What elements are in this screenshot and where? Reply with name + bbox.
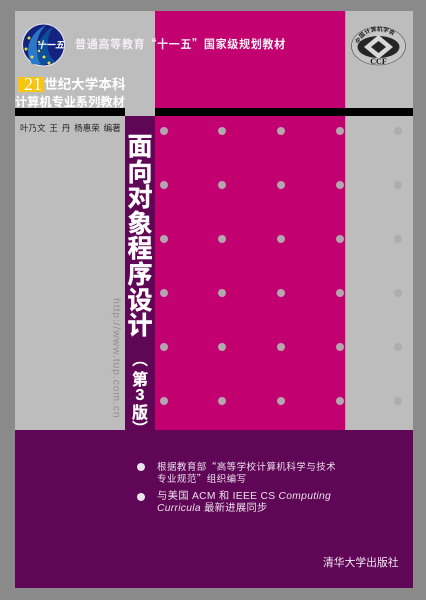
text: bullet 2: 与美国 ACM 和 IEEE CS Computing [157,491,331,502]
text: bullet 1: 专业规范”组织编写 [157,470,247,484]
edition 版: 版 [132,399,148,423]
black bar right [155,108,413,116]
panel: grey book cover [15,11,413,431]
black bar left [15,108,125,116]
text: bullet 1: 根据教育部“高等学校计算机科学与技术 [157,459,336,473]
edition close bracket: ） [128,420,152,436]
icon: CCF logo: CCF [370,57,387,66]
text: edition vertical [128,351,152,436]
heading: series name line 1: 世纪大学本科 [44,73,126,93]
text: publisher: 清华大学出版社 [323,554,399,570]
text: url vertical: http://www.tup.com.cn [110,298,122,419]
bullet 1 [137,463,145,471]
icon: eleventh five-year plan logo [22,24,65,66]
panel: purple title column [125,116,155,431]
heading: series name line 2: 计算机专业系列教材 [15,92,125,110]
text: book title vertical: 向 [127,153,152,189]
text: authors: 叶乃文 王 丹 杨惠荣 编著 [20,122,121,134]
text: book title vertical: 序 [127,255,152,291]
edition 第: 第 [132,366,148,390]
edition 3: 3 [136,387,144,404]
text: bullet 2: Curricula 最新进展同步 [157,502,268,514]
text: bullet 1 [157,459,336,484]
icon: eleventh five-year plan logo: 十一五 [37,38,65,51]
badge: yellow 21 [18,77,44,92]
panel: purple bottom [15,430,413,588]
text: book title vertical: 对 [127,178,152,214]
text: book title vertical: 程 [127,229,152,265]
panel: magenta centre [155,11,346,431]
heading: series title top: 普通高等教育“十一五”国家级规划教材 [75,36,286,52]
icon: CCF logo [351,26,406,66]
text: book title vertical: 设 [127,281,152,317]
text: book title vertical: 计 [127,306,152,342]
text: book title vertical: 象 [127,204,152,240]
text: book title vertical [127,127,152,342]
text: book title vertical: 面 [127,127,152,163]
edition open bracket: （ [128,351,152,367]
number: 21: 21 [24,74,42,94]
text: bullet 2 [157,490,331,514]
bullet 2 [137,493,145,501]
